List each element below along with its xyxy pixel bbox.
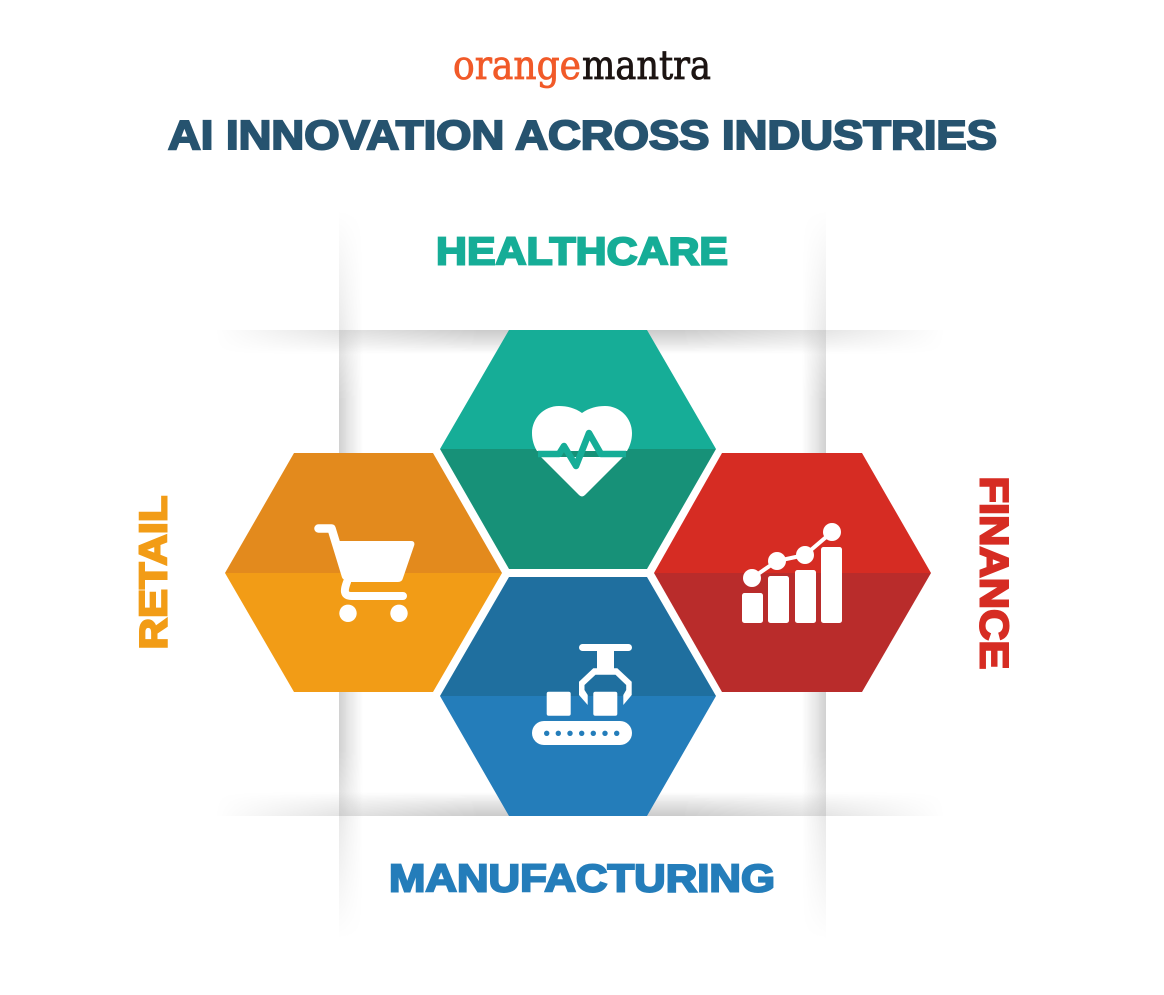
logo: orangemantra: orange xyxy=(453,43,581,89)
icon: shopping cart xyxy=(318,528,414,622)
heading: healthcare: HEALTHCARE xyxy=(436,230,728,274)
panel: finance hexagon xyxy=(654,453,931,692)
panel: manufacturing hexagon xyxy=(440,577,716,816)
frame shadows xyxy=(254,258,906,892)
icon: robotic arm over conveyor xyxy=(532,644,632,745)
icon: growth bar chart xyxy=(742,523,842,623)
icon: heart with pulse xyxy=(532,406,632,496)
panel: healthcare hexagon xyxy=(440,330,716,569)
heading: retail: RETAIL xyxy=(132,496,176,650)
title: AI INNOVATION ACROSS INDUSTRIES xyxy=(168,112,997,158)
heading: finance: FINANCE xyxy=(972,476,1016,670)
logo: orangemantra xyxy=(453,43,711,89)
logo: orangemantra: mantra xyxy=(582,43,711,89)
panel: retail hexagon xyxy=(225,453,502,692)
heading: manufacturing: MANUFACTURING xyxy=(389,858,775,900)
